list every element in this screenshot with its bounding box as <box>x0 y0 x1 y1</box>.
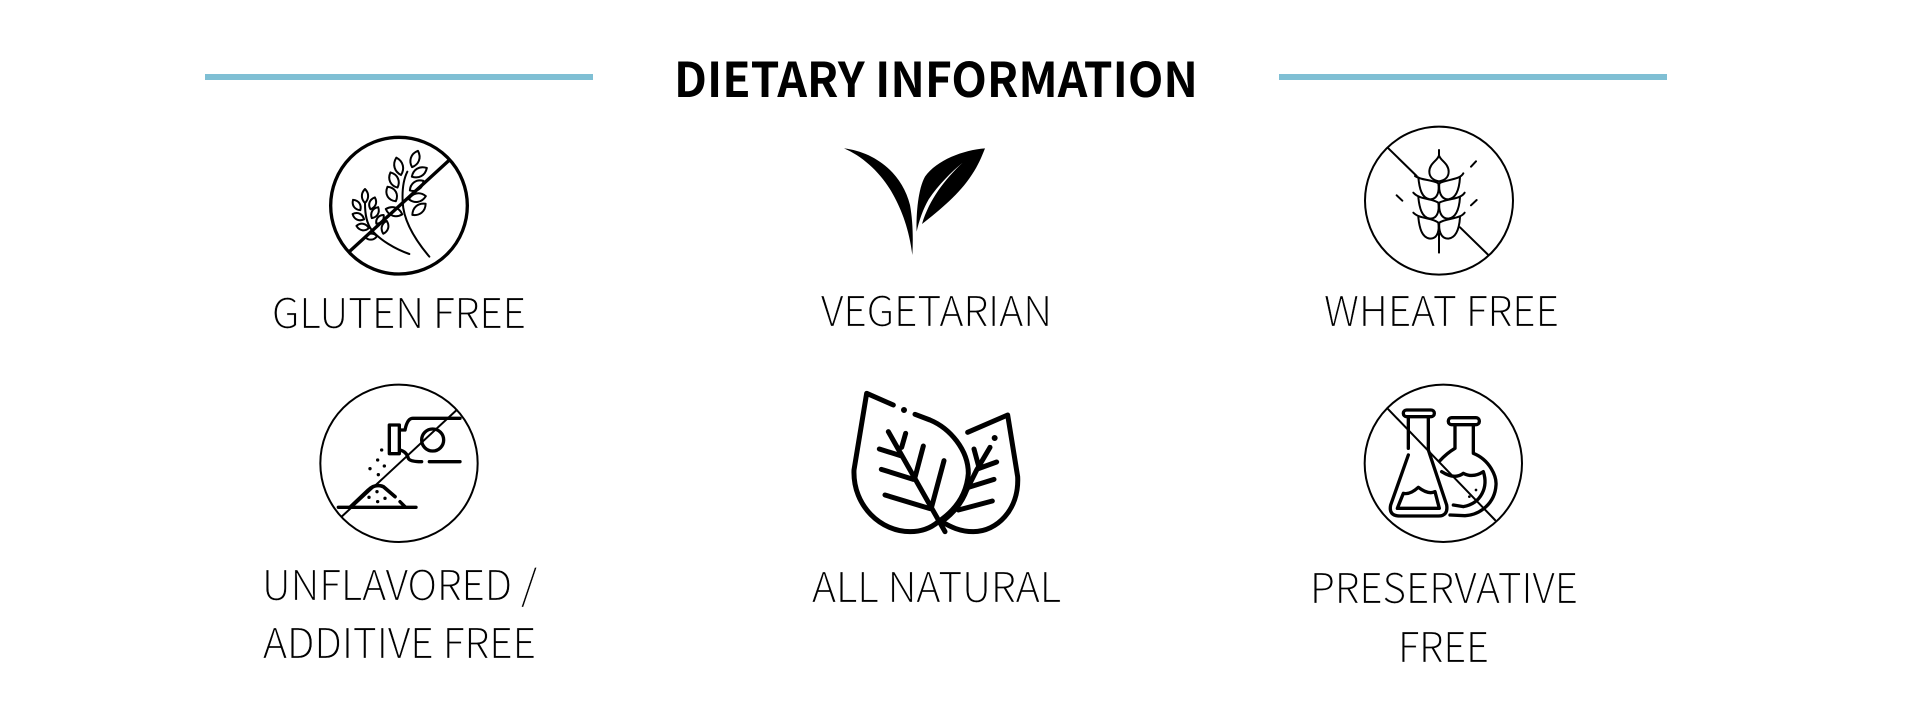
label: preservative free: FREE <box>1398 614 1489 674</box>
icon: two leaves <box>844 148 985 255</box>
label: wheat free: WHEAT FREE <box>1324 278 1559 338</box>
label: all natural: ALL NATURAL <box>812 554 1061 614</box>
panel: unflavored / additive free <box>262 385 537 670</box>
panel: gluten free <box>272 137 526 340</box>
icon: crossed wheat ear <box>1365 127 1513 275</box>
panel: vegetarian <box>821 148 1052 338</box>
label: gluten free: GLUTEN FREE <box>272 280 526 340</box>
panel: all natural <box>812 393 1061 614</box>
icon: crossed shaker and powder <box>320 385 478 542</box>
panel: preservative free <box>1310 385 1578 674</box>
panel: wheat free <box>1324 127 1559 338</box>
label: preservative free: PRESERVATIVE <box>1310 555 1578 615</box>
icon: two veined leaves <box>854 393 1018 532</box>
label: unflavored / additive free: UNFLAVORED / <box>262 552 537 612</box>
icon: crossed lab flasks <box>1365 385 1522 542</box>
label: preservative free <box>1310 555 1578 674</box>
label: vegetarian: VEGETARIAN <box>821 278 1052 338</box>
label: unflavored / additive free: ADDITIVE FREE <box>263 610 536 670</box>
title: DIETARY INFORMATION <box>674 41 1198 111</box>
label: unflavored / additive free <box>262 552 537 670</box>
icon: crossed grain sprigs <box>331 137 467 274</box>
